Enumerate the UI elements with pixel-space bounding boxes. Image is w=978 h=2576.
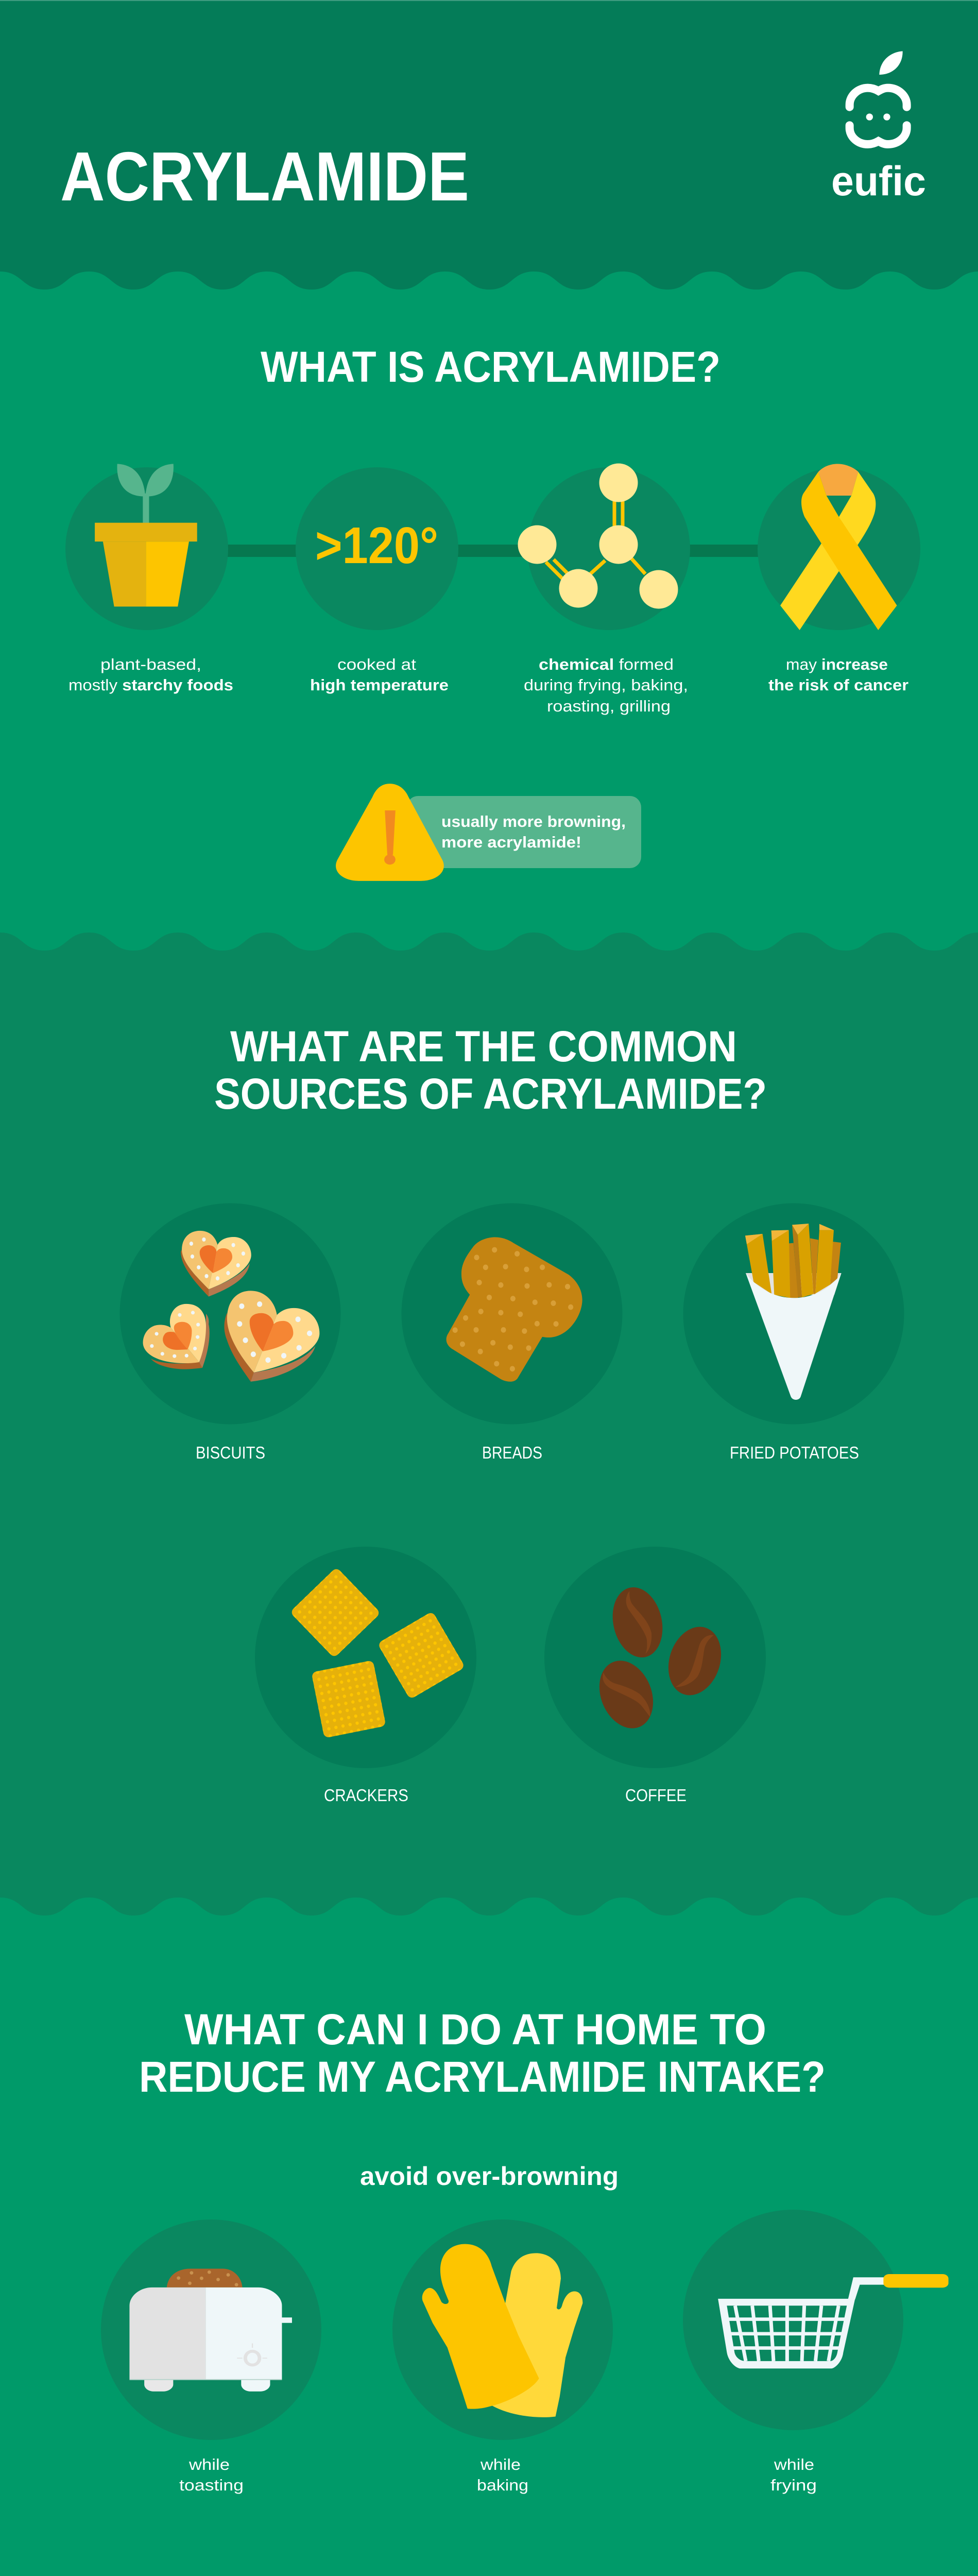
icon: warning triangle <box>336 784 444 881</box>
caption: plant-based: mostly starchy foods <box>68 676 233 694</box>
caption: chemical formed: chemical formed <box>539 655 674 673</box>
logo: eufic <box>831 51 926 205</box>
caption: plant-based: plant-based, <box>100 655 201 673</box>
heading: reduce intake: WHAT CAN I DO AT HOME TO <box>184 2005 766 2054</box>
caption: may increase risk of cancer: may increase <box>786 655 888 673</box>
caption: while toasting: toasting <box>179 2476 244 2494</box>
heading: what is acrylamide: WHAT IS ACRYLAMIDE? <box>261 343 720 391</box>
heading: common sources: SOURCES OF ACRYLAMIDE? <box>214 1070 767 1118</box>
caption: cooked at high temperature <box>310 655 449 694</box>
caption: while frying: while <box>774 2455 814 2473</box>
label: breads: BREADS <box>482 1443 542 1462</box>
header band <box>0 0 978 290</box>
caption: while frying <box>770 2455 817 2494</box>
title: ACRYLAMIDE <box>60 138 469 215</box>
caption: chemical formed: roasting, grilling <box>547 697 671 715</box>
label: fried potatoes: FRIED POTATOES <box>730 1443 859 1462</box>
caption: may increase risk of cancer <box>768 655 908 694</box>
icon: crackers <box>255 1547 476 1768</box>
background: sources section band <box>0 933 978 1958</box>
caption: cooked at high temperature: cooked at <box>337 655 416 673</box>
icon: molecule <box>518 464 690 630</box>
background: home section band <box>0 1897 978 2576</box>
label: crackers: CRACKERS <box>324 1786 408 1805</box>
caption: chemical formed: during frying, baking, <box>524 676 688 694</box>
callout: browning warning <box>336 784 641 881</box>
callout: browning warning: more acrylamide! <box>441 833 581 851</box>
heading: common sources: WHAT ARE THE COMMON <box>230 1022 737 1071</box>
caption: while baking: baking <box>477 2476 528 2494</box>
caption: may increase risk of cancer: the risk of cancer <box>768 676 908 694</box>
panel: what is acrylamide <box>65 343 920 881</box>
label: biscuits: BISCUITS <box>196 1443 265 1462</box>
icon: biscuits <box>119 1204 341 1424</box>
icon: coffee beans <box>544 1547 766 1768</box>
connector bar <box>227 545 762 557</box>
caption: while toasting: while <box>188 2455 230 2473</box>
icon: plant pot <box>65 464 228 630</box>
icon: ribbon <box>758 464 920 630</box>
icon: bread <box>402 1204 622 1424</box>
icon: toaster <box>101 2219 321 2440</box>
caption: chemical formed <box>524 655 688 715</box>
icon: oven mitts <box>392 2219 613 2440</box>
callout: browning warning: usually more browning, <box>441 812 626 831</box>
caption: while baking <box>477 2455 528 2494</box>
heading: reduce intake <box>139 2005 826 2101</box>
panel: common sources <box>119 1022 904 1805</box>
caption: while frying: frying <box>770 2476 817 2494</box>
icon: frying basket <box>683 2210 949 2430</box>
subheading: avoid over-browning: avoid over-browning <box>360 2162 619 2191</box>
caption: cooked at high temperature: high temperature <box>310 676 449 694</box>
icon: fries <box>683 1204 904 1424</box>
logo: eufic: eufic <box>831 158 926 205</box>
caption: while baking: while <box>480 2455 521 2473</box>
heading: reduce intake: REDUCE MY ACRYLAMIDE INTAKE? <box>139 2053 826 2101</box>
panel: what can I do at home <box>101 2005 949 2576</box>
icon: temperature <box>296 467 458 630</box>
caption: while toasting <box>179 2455 244 2494</box>
heading: common sources <box>214 1022 767 1118</box>
label: coffee: COFFEE <box>625 1786 687 1805</box>
icon: temperature: >120° <box>315 517 438 574</box>
caption: plant-based <box>68 655 233 694</box>
